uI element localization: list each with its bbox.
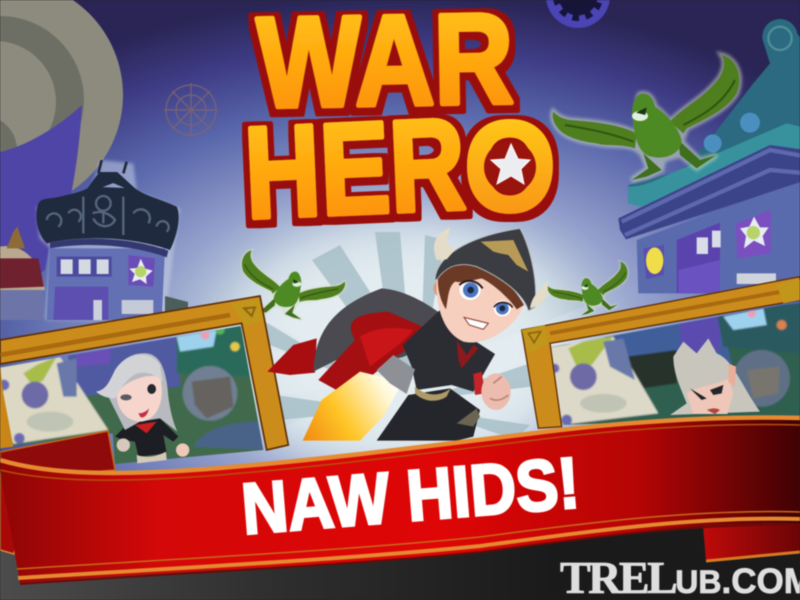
hero character: [267, 227, 548, 441]
red banner: [0, 418, 800, 584]
background ring arcs: [0, 0, 123, 210]
dark footer: [0, 520, 800, 600]
banner tail left: [0, 470, 24, 554]
elf character: [670, 338, 760, 415]
left small building: [0, 227, 45, 320]
left picture frame: [0, 296, 288, 470]
bird: top right: [553, 55, 739, 180]
bird: small right: [547, 262, 627, 315]
banner back fold left: [0, 431, 115, 480]
left tower building: [36, 160, 180, 320]
head: [433, 265, 524, 343]
right building: [618, 19, 800, 293]
gauntlet: [377, 355, 415, 394]
bird: small left: [242, 250, 345, 319]
torso: [403, 310, 495, 392]
frame wood: [0, 296, 288, 450]
frame wood: [522, 277, 800, 428]
red cape lining: [318, 312, 424, 396]
center light glow: [235, 230, 575, 470]
legs: [377, 388, 480, 441]
icon: star in title: [484, 141, 536, 193]
center rays: [262, 232, 545, 440]
hat: [435, 228, 536, 311]
sunburst rays: [215, 290, 600, 440]
banner tail right: [703, 510, 800, 561]
grey cape: [313, 288, 448, 373]
right frame artwork: [548, 302, 800, 427]
gear emblem: [546, 0, 610, 28]
red cape tail: [267, 338, 317, 375]
gold stripe right tail: [706, 552, 800, 561]
banner text: NAW HIDS!: [239, 443, 582, 550]
left frame artwork: [0, 323, 267, 470]
spoked wheel emblem: [164, 83, 218, 137]
flame: [303, 372, 398, 441]
right picture frame: [522, 277, 800, 428]
title: HERO: O: [464, 96, 556, 239]
girl character: [96, 353, 189, 463]
purple backdrop shape: [0, 105, 82, 300]
hill behind left frame: [165, 296, 188, 312]
feathers: [434, 227, 548, 308]
title: HERO: HER: [242, 91, 468, 246]
fist: [473, 372, 485, 395]
